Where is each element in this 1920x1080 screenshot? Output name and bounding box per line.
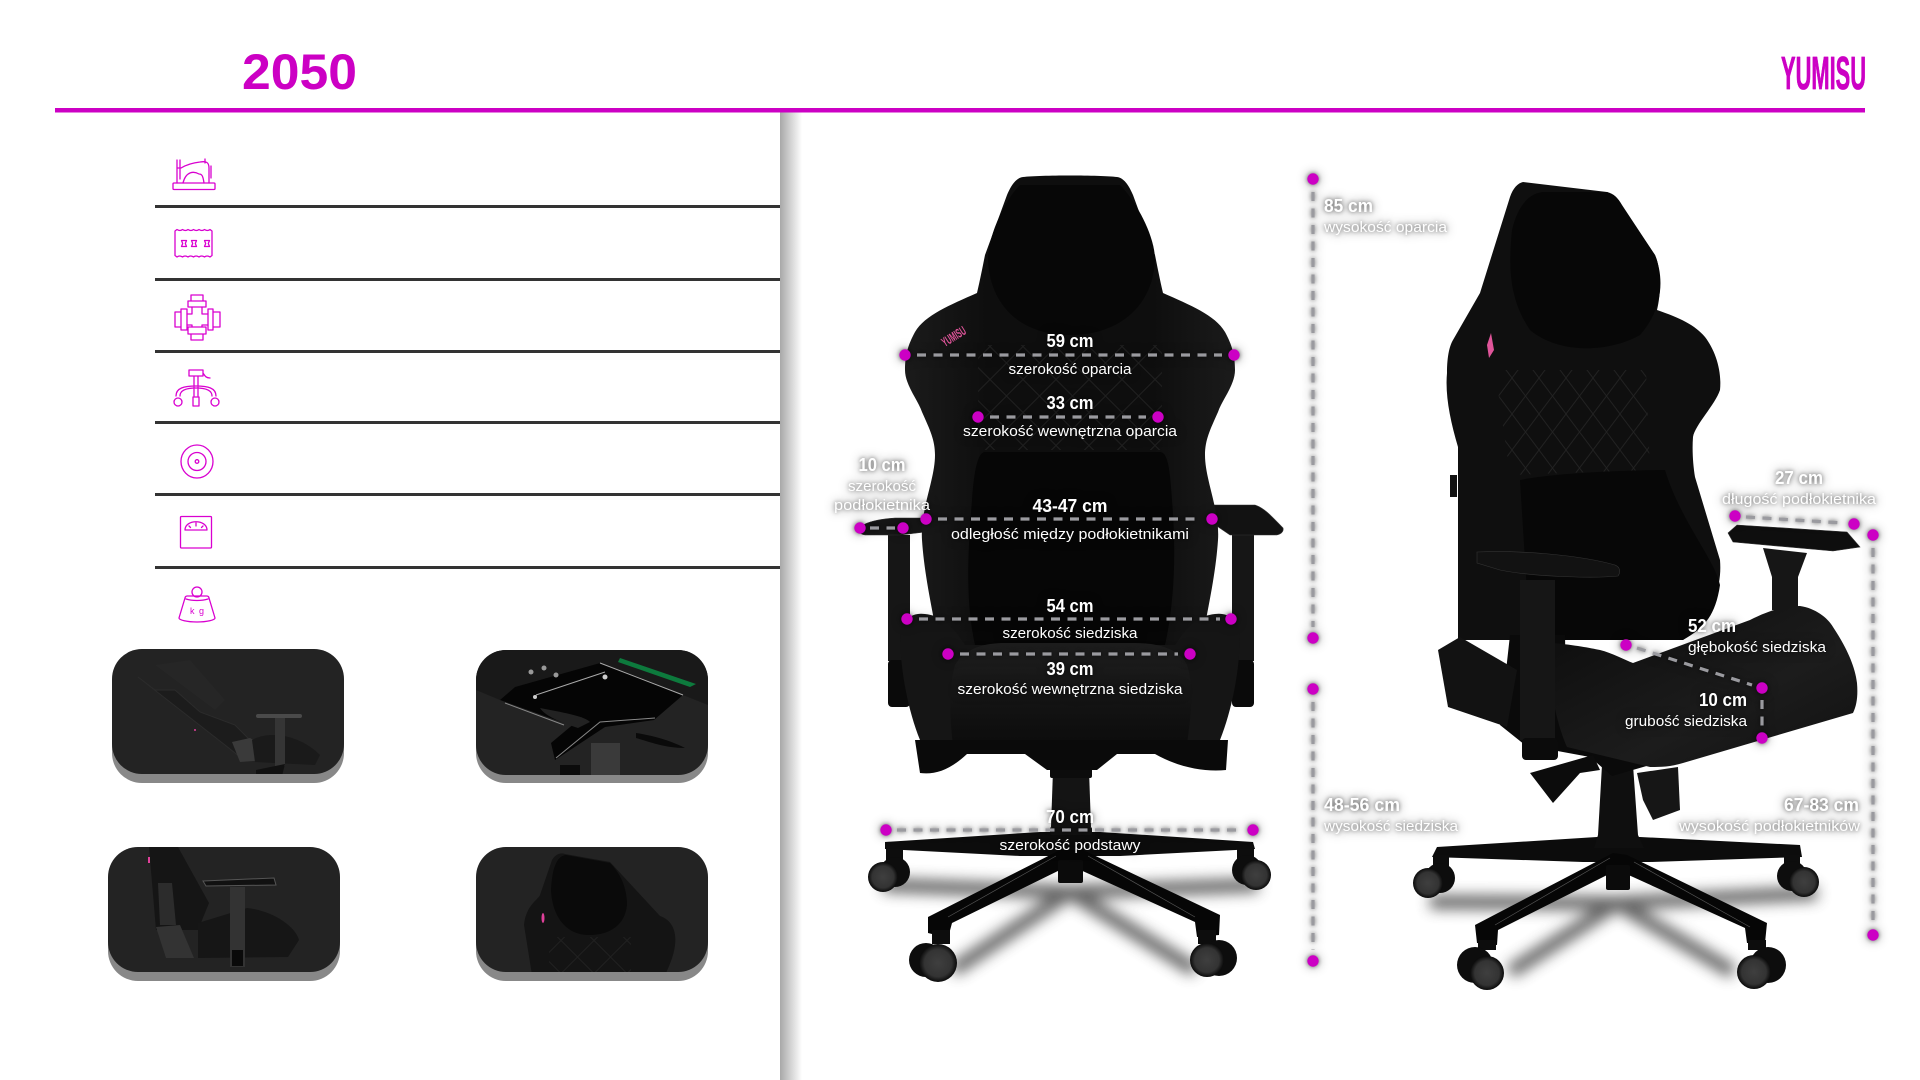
base and casters (868, 768, 1271, 982)
measurement: backrest width 59 cm: 59 cm (1046, 331, 1094, 351)
card: adjustable armrest (108, 847, 340, 981)
lumbar cushion (968, 452, 1174, 645)
measurement: base width 70 cm: szerokość podstawy (1000, 837, 1141, 854)
header rule (55, 108, 1865, 112)
measurement: distance between armrests 43-47 cm: odległość między podłokietnikami (951, 526, 1189, 543)
chair: front view (859, 176, 1283, 982)
height knob (1637, 767, 1680, 820)
side label (1450, 475, 1457, 497)
icon: weighing scale (180, 516, 212, 548)
measurement: seat thickness 10 cm (1625, 690, 1768, 744)
measurement: armrest length 27 cm (1722, 468, 1877, 530)
measurement: seat height 48-56 cm: 48-56 cm (1324, 795, 1400, 815)
icon: kg weight (179, 587, 215, 622)
measurement: distance between armrests 43-47 cm: 43-47 cm (1032, 496, 1108, 516)
icon: kg weight: kg (190, 606, 204, 616)
lever (1530, 755, 1600, 803)
panel shadow: left specification panel edge (780, 112, 802, 1080)
backrest shell (1447, 182, 1720, 640)
headrest (1510, 192, 1660, 348)
side bracket (1438, 637, 1517, 727)
icon: foam padding (175, 230, 212, 257)
chair shadow: front view (883, 885, 1258, 970)
quilted panel (978, 345, 1162, 450)
seat (1550, 606, 1857, 767)
measurement: seat depth 52 cm: głębokość siedziska (1688, 639, 1827, 656)
quilted panel (1495, 370, 1650, 475)
lumbar cushion (1520, 470, 1720, 640)
measurement: backrest height 85 cm (1307, 173, 1448, 644)
measurement: inner backrest width 33 cm (963, 393, 1178, 440)
measurement: seat width 54 cm: 54 cm (1046, 596, 1094, 616)
measurement: seat thickness 10 cm: 10 cm (1699, 690, 1747, 710)
measurement: armrest width 10 cm: szerokość (848, 478, 916, 495)
chair shadow: side view (1430, 893, 1817, 972)
chair: three-quarter view (1413, 182, 1860, 990)
measurement: base width 70 cm: 70 cm (1046, 807, 1094, 827)
rear armrest (1728, 525, 1860, 610)
measurement: armrest length 27 cm: 27 cm (1775, 468, 1823, 488)
card: headrest cushion (476, 847, 708, 981)
icon: chair base (174, 370, 219, 406)
title: model number: 2050 (242, 44, 357, 100)
icon: wheel (181, 445, 213, 478)
measurement: armrest width 10 cm: 10 cm (858, 455, 906, 475)
measurement: backrest height 85 cm: wysokość oparcia (1323, 219, 1448, 236)
measurement: backrest width 59 cm: szerokość oparcia (1008, 361, 1132, 378)
armrests (859, 505, 1283, 707)
measurement: backrest height 85 cm: 85 cm (1324, 196, 1373, 216)
measurement: inner seat width 39 cm: szerokość wewnętrzna siedziska (958, 681, 1183, 698)
backrest shell (905, 176, 1235, 650)
card: tilt mechanism (476, 650, 708, 783)
icon: metal frame cross (175, 295, 220, 340)
logo patch: YUMISU (939, 323, 969, 350)
measurement: seat depth 52 cm: 52 cm (1688, 616, 1736, 636)
measurement: armrest height 67-83 cm (1678, 529, 1879, 941)
headrest (988, 185, 1155, 335)
measurement: seat depth 52 cm (1620, 616, 1827, 694)
measurement: armrest width 10 cm (834, 455, 931, 534)
measurement: inner seat width 39 cm (942, 648, 1196, 698)
lower frame behind seat (1500, 635, 1650, 776)
measurement: inner backrest width 33 cm: 33 cm (1046, 393, 1094, 413)
front armrest (1477, 552, 1620, 760)
pink logo tag (1487, 333, 1494, 358)
seat (900, 614, 1240, 740)
measurement: seat width 54 cm (901, 596, 1237, 642)
measurement: inner seat width 39 cm: 39 cm (1046, 659, 1094, 679)
measurement: armrest width 10 cm: podłokietnika (834, 497, 931, 514)
levers and mechanism (915, 740, 1228, 773)
panel: specification list (155, 159, 780, 622)
measurement: seat height 48-56 cm: wysokość siedziska (1323, 818, 1459, 835)
measurement: backrest width 59 cm (899, 331, 1240, 378)
measurement: seat thickness 10 cm: grubość siedziska (1625, 713, 1748, 730)
measurement: seat height 48-56 cm (1307, 683, 1459, 967)
base and casters (1413, 765, 1819, 990)
measurement: seat width 54 cm: szerokość siedziska (1002, 625, 1138, 642)
measurement: distance between armrests 43-47 cm (920, 496, 1218, 543)
measurement: inner backrest width 33 cm: szerokość wewnętrzna oparcia (963, 423, 1178, 440)
measurement: armrest height 67-83 cm: wysokość podłokietników (1678, 818, 1860, 835)
icon: sewing machine (173, 159, 215, 190)
measurement: armrest length 27 cm: długość podłokietnika (1722, 491, 1877, 508)
measurement: armrest height 67-83 cm: 67-83 cm (1784, 795, 1859, 815)
seat cushion (950, 643, 1191, 745)
measurement: base width 70 cm (880, 807, 1259, 854)
card: reclining backrest (112, 649, 344, 783)
